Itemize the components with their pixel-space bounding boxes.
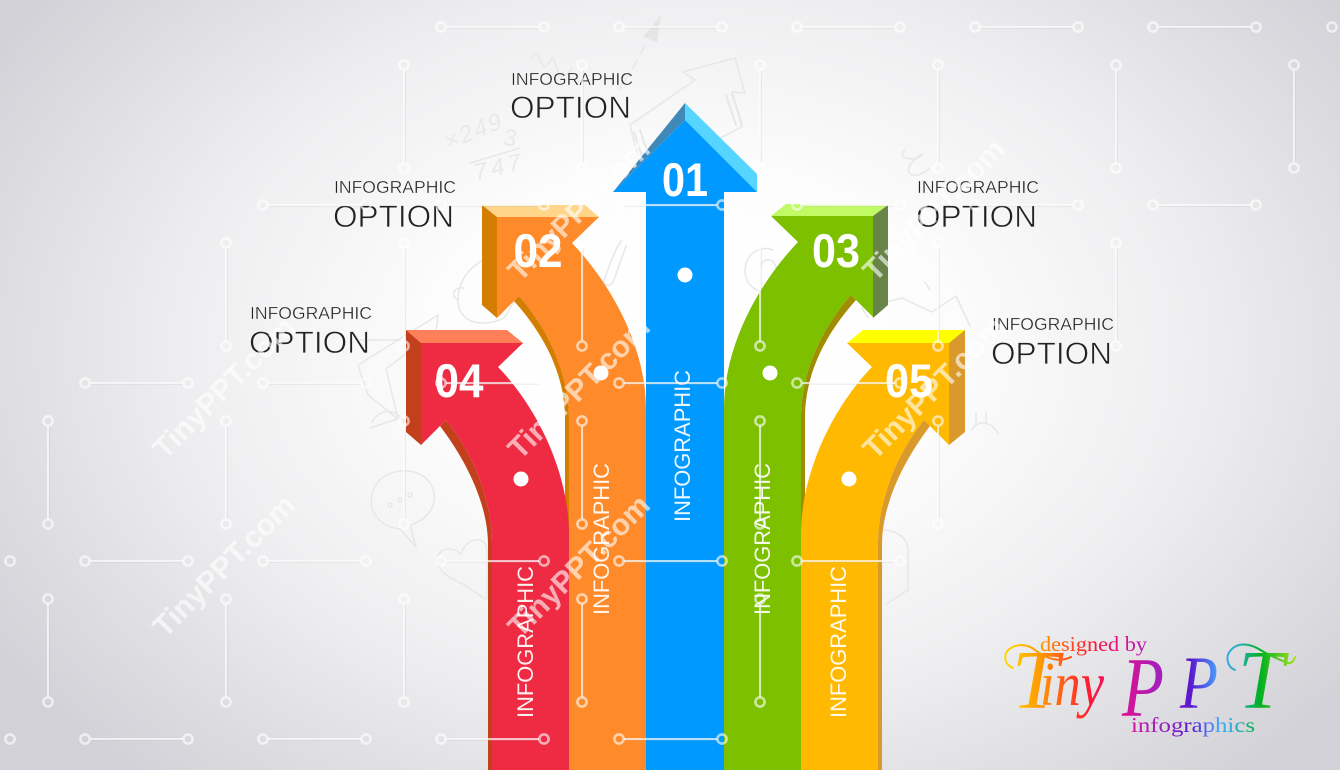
doodle sketches [358, 15, 998, 604]
logo: designed by TinyPPT infographics [1005, 632, 1295, 737]
watermarks: TinyPPT.com [147, 311, 302, 466]
step numbers: 05 [885, 354, 933, 407]
marker dots [514, 268, 856, 486]
logo: designed by TinyPPT infographics: P [1121, 641, 1164, 735]
label 02: OPTION [333, 198, 454, 234]
label 05 [991, 314, 1114, 371]
option labels [249, 69, 1114, 371]
logo: designed by TinyPPT infographics: designed by [1040, 632, 1148, 656]
watermarks: TinyPPT.com [857, 133, 1012, 288]
vertical arrow labels: INFOGRAPHIC [826, 566, 851, 718]
label 05: INFOGRAPHIC [992, 314, 1114, 334]
label 05: OPTION [991, 335, 1112, 371]
label 03: INFOGRAPHIC [917, 177, 1039, 197]
label 02 [333, 177, 456, 234]
label 04: OPTION [249, 324, 370, 360]
vertical arrow labels: INFOGRAPHIC [670, 370, 695, 522]
math sketch: 3 [503, 125, 517, 152]
arrow 01: blue [613, 103, 757, 770]
label 03 [916, 177, 1039, 234]
label 02: INFOGRAPHIC [334, 177, 456, 197]
logo: designed by TinyPPT infographics: T [1238, 634, 1289, 727]
logo: designed by TinyPPT infographics: P [1179, 642, 1218, 725]
label 03: OPTION [916, 198, 1037, 234]
watermarks: TinyPPT.com [502, 133, 657, 288]
label 04: INFOGRAPHIC [250, 303, 372, 323]
arrow 02: orange [482, 205, 646, 770]
watermarks: TinyPPT.com [502, 311, 657, 466]
step numbers [434, 153, 933, 407]
logo: designed by TinyPPT infographics: T [1012, 634, 1064, 727]
watermarks: TinyPPT.com [502, 489, 657, 644]
step numbers: 04 [434, 354, 484, 407]
logo: designed by TinyPPT infographics: infographics [1131, 713, 1255, 737]
step numbers: 03 [812, 224, 860, 277]
arrow 04: red [406, 330, 569, 770]
watermarks [147, 133, 1012, 644]
watermarks: TinyPPT.com [147, 489, 302, 644]
watermarks: TinyPPT.com [857, 311, 1012, 466]
step numbers: 01 [662, 153, 708, 206]
vertical arrow labels: INFOGRAPHIC [589, 463, 614, 615]
label 01: OPTION [510, 89, 631, 125]
vertical arrow labels [513, 370, 851, 718]
math sketch: 747 [471, 148, 528, 187]
vertical arrow labels: INFOGRAPHIC [750, 463, 775, 615]
vertical arrow labels: INFOGRAPHIC [513, 566, 538, 718]
math sketch [440, 107, 528, 187]
label 04 [249, 303, 372, 360]
label 01 [510, 69, 633, 125]
logo: designed by TinyPPT infographics: iny [1040, 651, 1104, 719]
step numbers: 02 [514, 224, 562, 277]
math sketch: ×249 [440, 107, 508, 156]
arrow 05: yellow [801, 330, 965, 770]
label 01: INFOGRAPHIC [511, 69, 633, 89]
arrow 03: green [724, 204, 888, 770]
